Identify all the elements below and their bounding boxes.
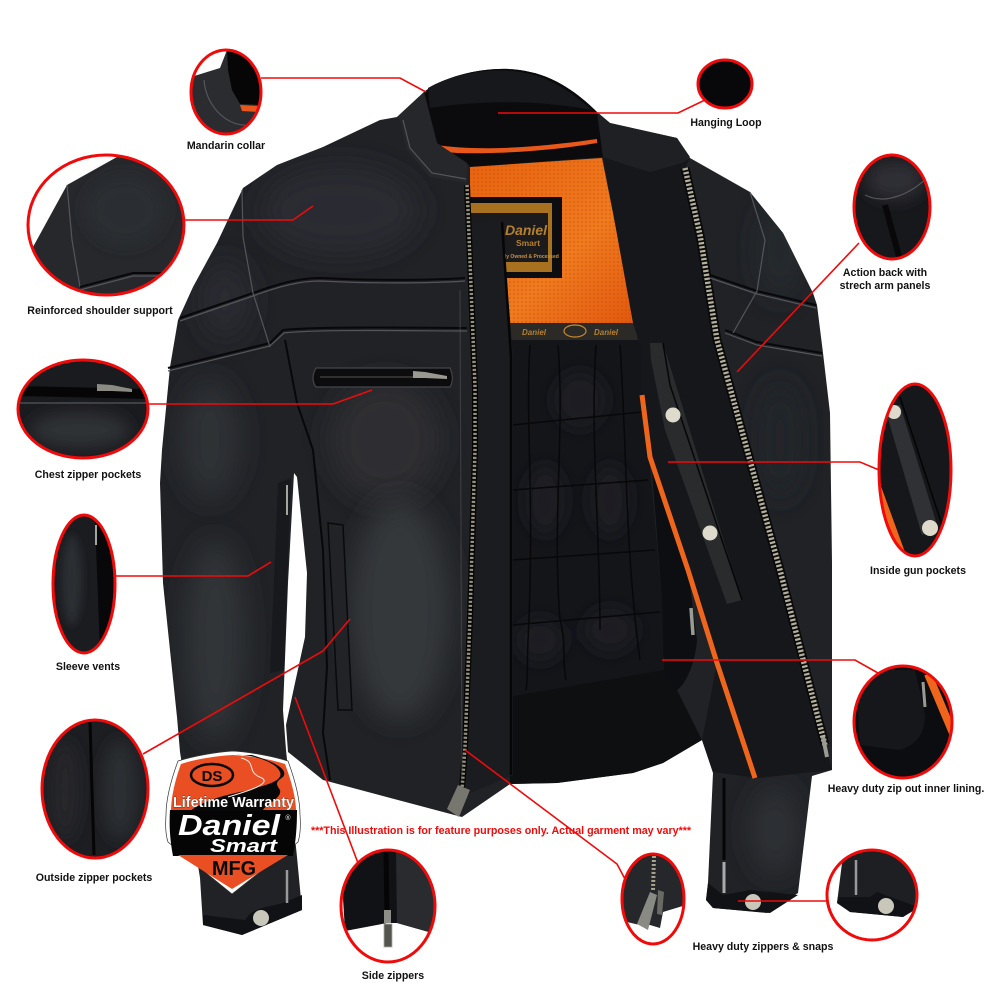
inner zip pocket bbox=[648, 420, 697, 690]
neck label strip: Daniel bbox=[594, 328, 619, 337]
callout: mandarin collar: Mandarin collar bbox=[187, 140, 265, 152]
neck label strip bbox=[510, 323, 637, 340]
callout: hanging loop bbox=[498, 60, 762, 129]
jacket illustration bbox=[160, 69, 832, 935]
callout: action back: strech arm panels bbox=[840, 280, 930, 292]
callout: hanging loop: Hanging Loop bbox=[690, 117, 762, 129]
lifetime warranty badge: DS bbox=[202, 768, 222, 785]
collar back bbox=[424, 69, 603, 167]
DS emblem bbox=[191, 764, 233, 786]
bottom hem band bbox=[507, 670, 702, 784]
callout: inside gun pockets bbox=[668, 382, 966, 577]
callout: action back: Action back with bbox=[843, 267, 927, 279]
right open flap bbox=[597, 112, 832, 778]
woven label: Family Owned & Processed bbox=[493, 254, 559, 260]
lifetime warranty badge: ® bbox=[285, 814, 291, 822]
left collar front bbox=[397, 92, 467, 183]
chest zipper pocket bbox=[313, 368, 452, 387]
orange mesh lining bbox=[470, 158, 635, 323]
sleeve vent bbox=[270, 478, 291, 673]
callout: heavy duty zippers and snaps bbox=[465, 750, 833, 953]
woven label bbox=[468, 197, 562, 278]
disclaimer note: ***This Illustration is for feature purposes only. Actual garment may vary*** bbox=[311, 825, 692, 837]
right sleeve cuff bbox=[706, 778, 798, 913]
badge shield bbox=[166, 751, 300, 894]
left storm flap bbox=[466, 220, 513, 795]
callout: heavy duty zip out inner lining bbox=[662, 660, 984, 795]
lifetime warranty badge: Daniel bbox=[178, 810, 281, 842]
callout: mandarin collar bbox=[187, 50, 426, 152]
side pocket bbox=[328, 523, 352, 710]
leather highlights bbox=[180, 165, 802, 875]
yoke seams bbox=[168, 190, 822, 780]
lifetime warranty badge: Smart bbox=[210, 836, 278, 856]
orange collar trim bbox=[437, 139, 597, 153]
callout: heavy duty zip out inner lining: Heavy duty zip out inner lining. bbox=[828, 783, 984, 795]
neck label strip: Daniel bbox=[522, 328, 547, 337]
snap buttons bbox=[666, 408, 680, 422]
quilted inner lining bbox=[507, 340, 664, 697]
zipper right bbox=[685, 168, 825, 745]
callout: side zippers: Side zippers bbox=[362, 970, 424, 982]
zipper pull bbox=[447, 785, 470, 817]
callout: outside zipper pockets: Outside zipper pockets bbox=[36, 872, 152, 884]
callout: sleeve vents bbox=[52, 514, 271, 673]
woven label: Daniel bbox=[505, 222, 548, 238]
callout: action back bbox=[737, 153, 932, 372]
flap collar bbox=[597, 112, 690, 172]
left sleeve cuff bbox=[203, 870, 302, 935]
callout: inside gun pockets: Inside gun pockets bbox=[870, 565, 966, 577]
gun pocket strap bbox=[650, 343, 742, 604]
lifetime warranty badge bbox=[166, 751, 300, 894]
zipper left bbox=[462, 185, 475, 790]
callout: heavy duty zippers and snaps: Heavy duty zippers & snaps bbox=[693, 941, 833, 953]
orange piping bbox=[642, 395, 755, 778]
winding road bbox=[190, 755, 284, 811]
woven label: Smart bbox=[516, 238, 540, 248]
callout: reinforced shoulder support: Reinforced shoulder support bbox=[27, 305, 173, 317]
callout: chest zipper pockets bbox=[16, 358, 372, 481]
lifetime warranty badge: MFG bbox=[212, 858, 256, 880]
callout: chest zipper pockets: Chest zipper pockets bbox=[35, 469, 141, 481]
callout: outside zipper pockets bbox=[36, 619, 350, 884]
callout: sleeve vents: Sleeve vents bbox=[56, 661, 120, 673]
callout: side zippers bbox=[295, 697, 436, 982]
callout: reinforced shoulder support bbox=[20, 155, 313, 317]
jacket silhouette bbox=[160, 69, 832, 935]
callout: cuff snap bbox=[738, 848, 918, 940]
badge text: Lifetime Warranty bbox=[173, 795, 294, 811]
